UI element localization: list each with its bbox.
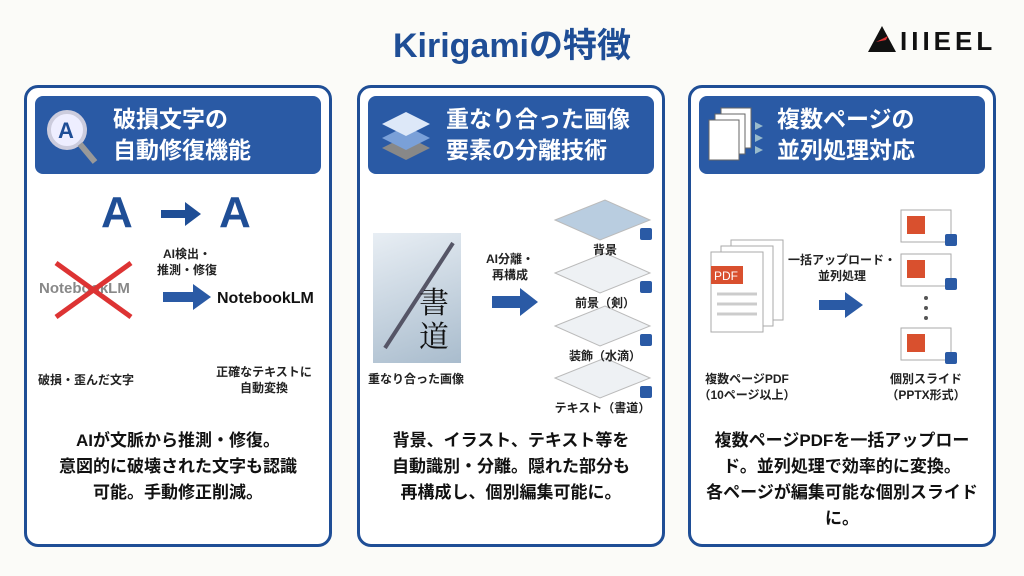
A to A: A [101,188,133,237]
description 1: 可能。手動修正削減。 [93,483,263,502]
panel: layer separation: 重なり合った画像 [368,372,464,386]
description 2: 再構成し、個別編集可能に。 [400,483,622,502]
process label: 推測・修復 [157,263,217,277]
process label [157,247,217,277]
panel: damaged text repair: 破損・歪んだ文字 [38,373,134,387]
arrow 3 [819,292,863,318]
A to A: A [219,188,251,237]
description 3 [706,431,978,528]
header 2: 要素の分離技術 [446,137,607,163]
slides [900,210,957,364]
header 3: 複数ページの [777,106,915,132]
panel: multi-page: 複数ページPDF [705,372,789,386]
panel: damaged text repair: 自動変換 [240,381,288,395]
fixed text: NotebookLM [217,290,314,307]
original image: 道 [419,312,449,356]
header 1: A [58,118,74,143]
layers: 背景 [593,243,617,257]
panel: layer separation: 再構成 [492,268,528,282]
panel: layer separation [357,85,665,547]
description 2: 自動識別・分離。隠れた部分も [392,457,630,476]
A to A [101,188,251,237]
description 3: 複数ページPDFを一括アップロー [715,431,969,450]
description 1 [59,431,297,502]
PDF stack [710,240,784,332]
header 2: 重なり合った画像 [446,106,630,132]
panel: multi-page: 一括アップロード・ [788,253,896,267]
panel: multi-page: 個別スライド [890,372,962,386]
original image [373,233,461,363]
panel: layer separation: AI分離・ [486,252,534,266]
panel: multi-page [688,85,996,547]
header 3: 並列処理対応 [777,137,915,163]
header 2 [368,96,654,174]
panel: damaged text repair [24,85,332,547]
header 1: 破損文字の [113,106,228,132]
header 1 [35,96,321,174]
broken text crossed: NotebookLM [39,280,130,297]
description 1: AIが文脈から推測・修復。 [76,431,280,450]
arrow [163,284,211,310]
panel: multi-page: （PPTX形式） [886,388,966,402]
panel: layer separation: テキスト（書道） [555,401,650,415]
description 1: 意図的に破壊された文字も認識 [59,457,297,476]
original image: 書 [419,278,449,322]
description 3: に。 [825,509,859,528]
panel: multi-page: （10ページ以上） [698,388,796,402]
description 2: 背景、イラスト、テキスト等を [393,431,629,450]
layers: 装飾（水滴） [569,349,641,363]
process label: AI検出・ [163,247,211,261]
panel: damaged text repair: 正確なテキストに [216,365,312,379]
description 3: 各ページが編集可能な個別スライド [706,483,978,502]
PDF stack: PDF [714,269,738,283]
description 3: ド。並列処理で効率的に変換。 [723,457,961,476]
header 3 [699,96,985,174]
panel: multi-page: 並列処理 [818,269,866,283]
layers: 前景（剣） [575,296,635,310]
layers [554,200,652,415]
title: Kirigamiの特徴 [393,27,631,65]
arrow 2 [492,288,538,316]
description 2 [392,431,630,502]
broken text crossed [39,261,132,319]
header 1: 自動修復機能 [113,137,251,163]
logo: IIIEEL [900,26,996,56]
